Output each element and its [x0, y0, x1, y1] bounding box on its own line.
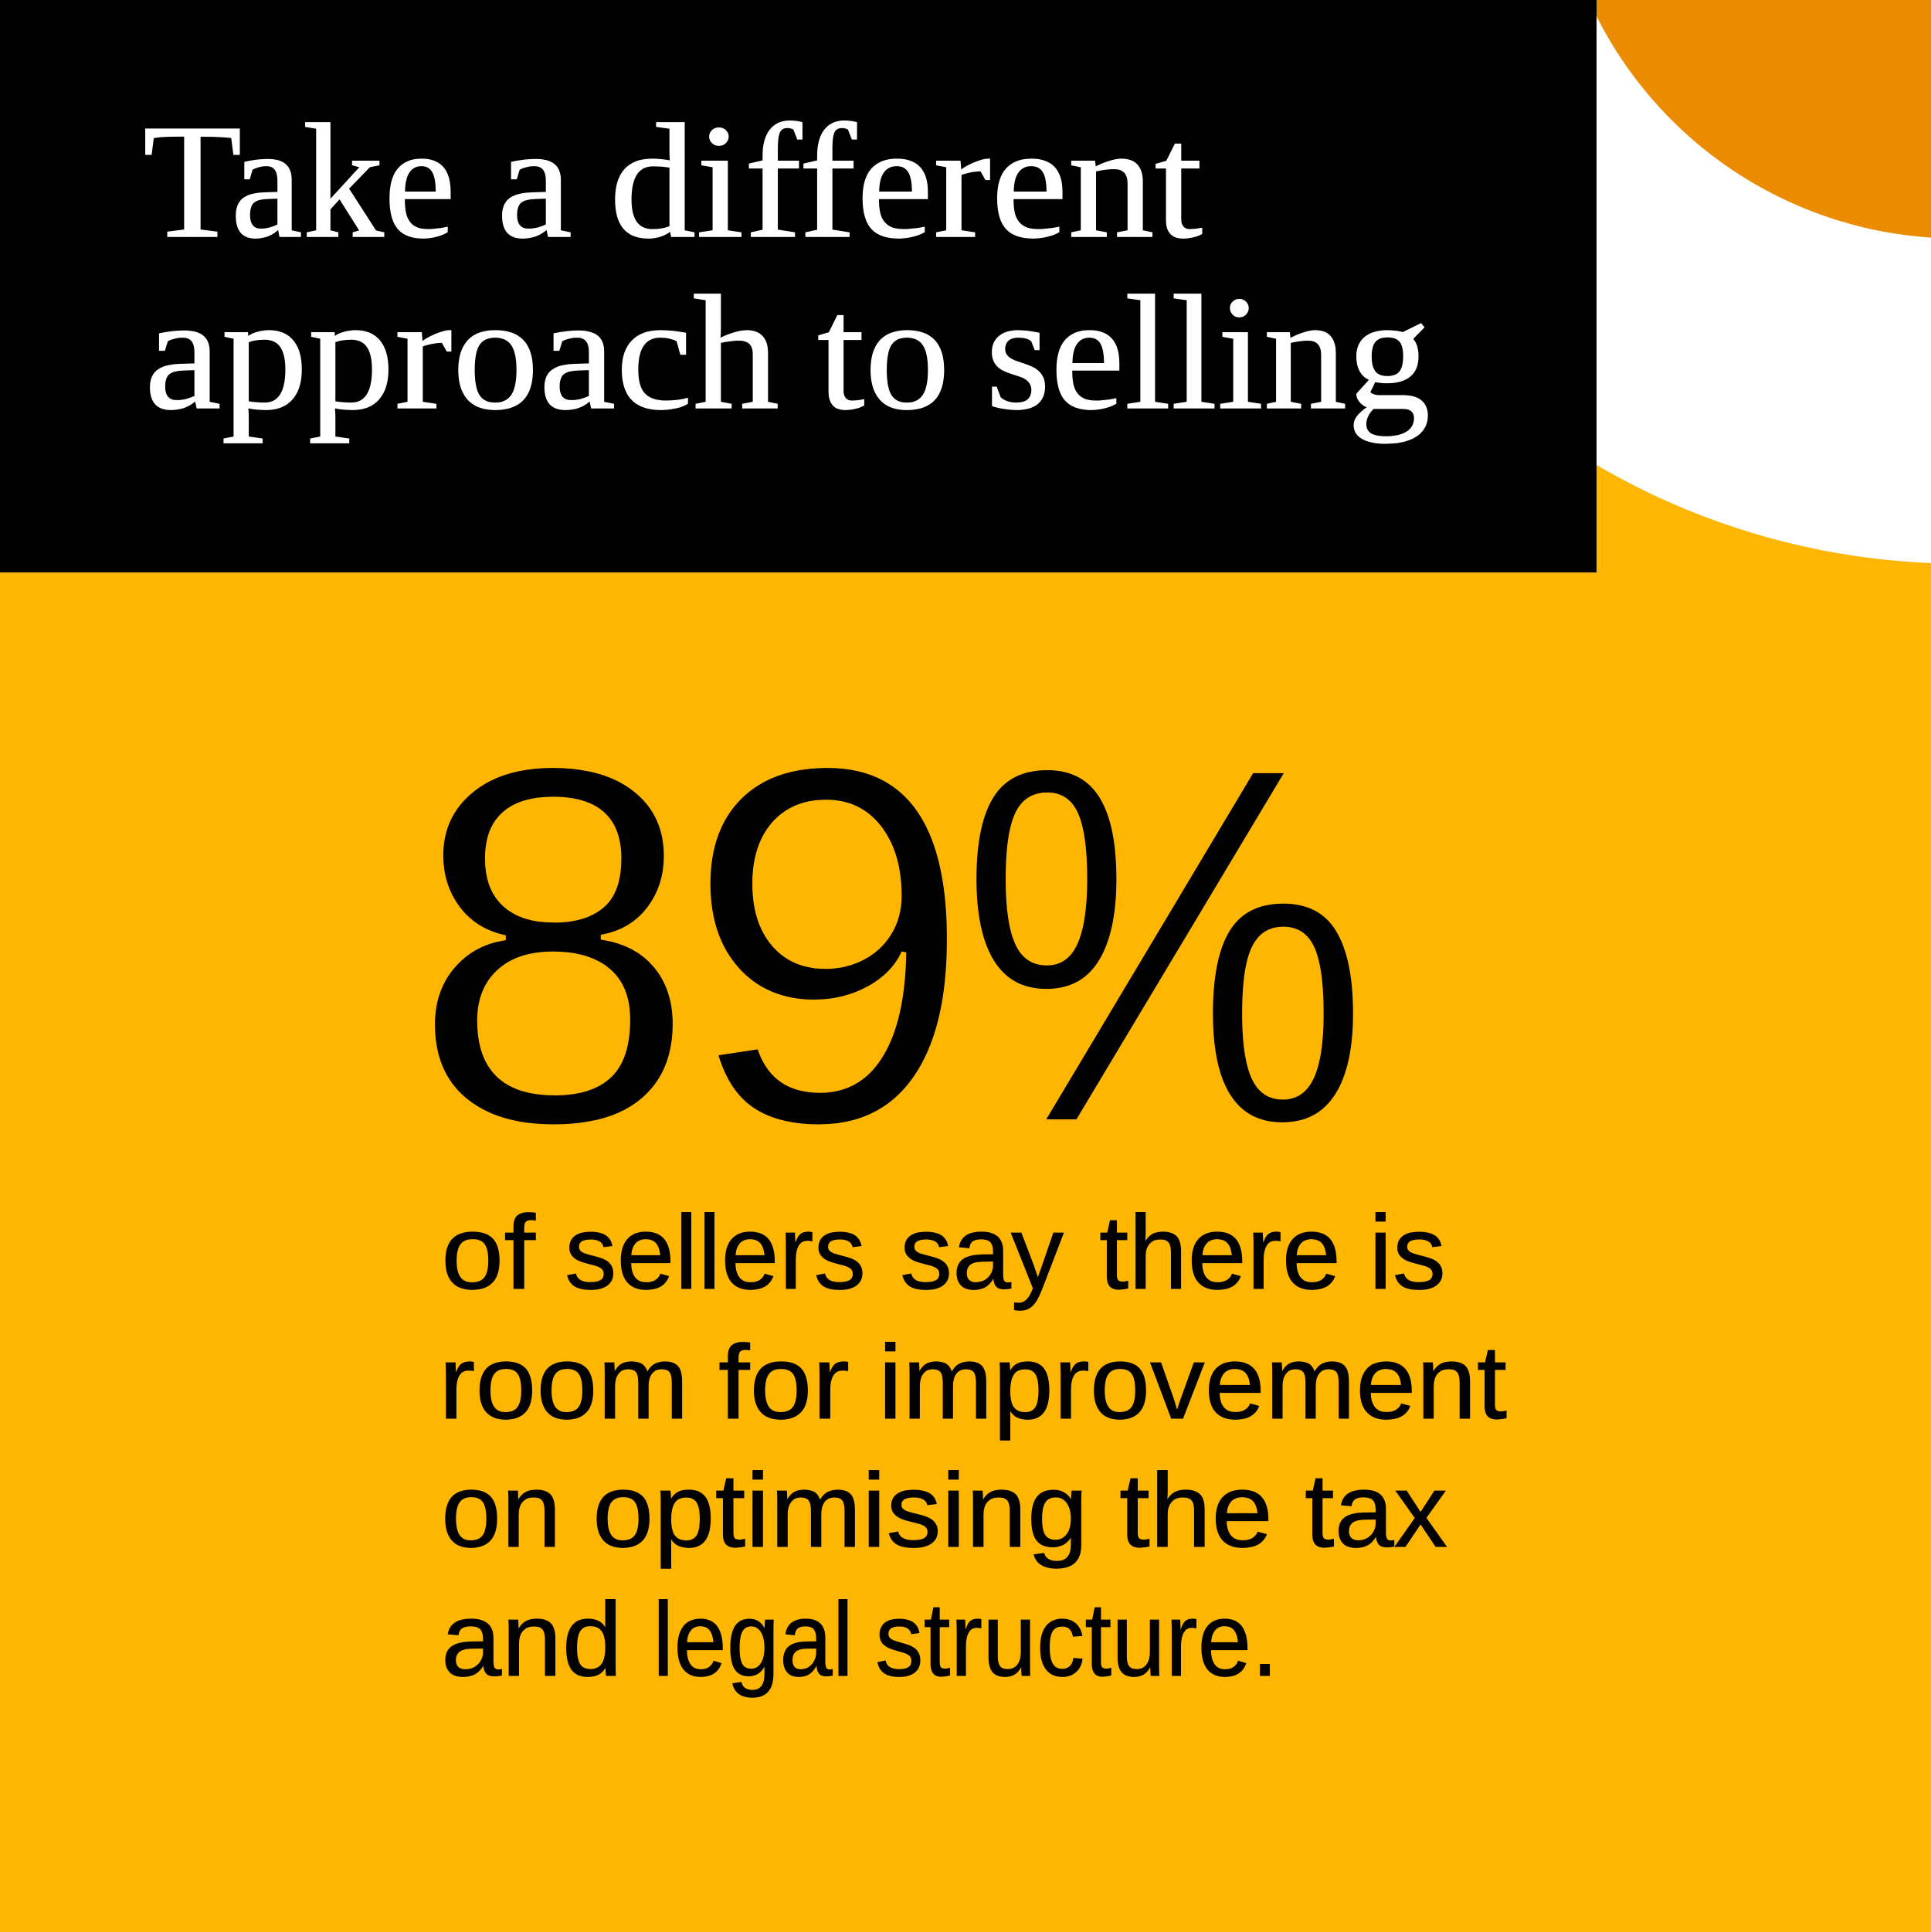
big statistic: 89% [410, 660, 1372, 1230]
statistic description: for [718, 1323, 850, 1441]
title panel [0, 0, 1597, 572]
big statistic: 89%: 8 [410, 660, 697, 1230]
statistic description: structure. [875, 1581, 1278, 1698]
title: a [497, 90, 572, 272]
statistic description: of [441, 1193, 535, 1311]
title: different [609, 90, 1203, 272]
title: approach [144, 262, 779, 443]
statistic description: is [1369, 1193, 1446, 1311]
statistic description: on [441, 1452, 562, 1569]
title: to [817, 262, 950, 443]
statistic description: improvement [878, 1323, 1507, 1441]
statistic description: legal [653, 1581, 854, 1698]
big statistic: 89%: % [958, 660, 1372, 1230]
title: selling [986, 262, 1430, 443]
statistic description: the [1119, 1452, 1273, 1569]
big statistic: 89%: 9 [684, 660, 974, 1230]
statistic description: there [1099, 1193, 1341, 1311]
statistic description: room [439, 1323, 689, 1441]
title: Take [143, 90, 456, 272]
statistic description: sellers [565, 1193, 866, 1311]
statistic description: optimising [592, 1452, 1088, 1569]
statistic description: say [900, 1193, 1064, 1311]
white circle decoration [1238, 0, 1931, 564]
statistic description: and [441, 1581, 623, 1698]
statistic description [439, 1193, 1507, 1698]
statistic description: tax [1305, 1452, 1447, 1569]
title [143, 90, 1430, 443]
orange circle decoration [1553, 0, 1931, 239]
